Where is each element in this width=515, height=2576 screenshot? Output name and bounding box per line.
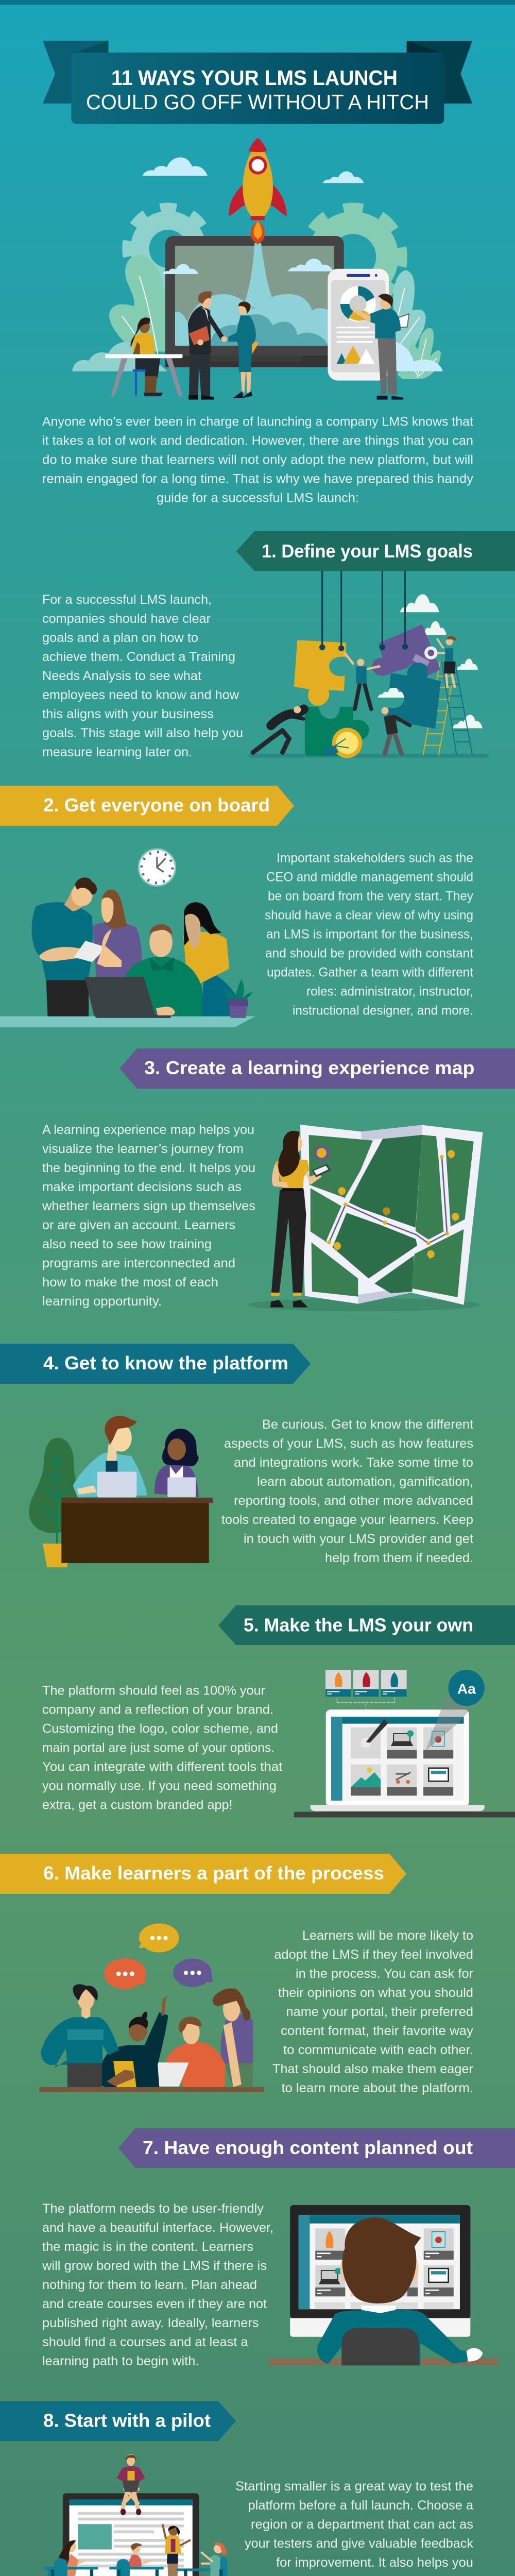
laptop [85,977,171,1018]
illustration: classroom with big screen [0,2454,227,2576]
text block 1: Needs Analysis to see what [42,669,201,683]
person: seated middle [109,2543,164,2576]
illustration: puzzle team [249,571,489,758]
shelf [294,1812,515,1817]
text block 5 [42,1684,283,1812]
text block 4: in touch with your LMS provider and get [244,1532,473,1546]
text block 3: visualize the learner’s journey from [42,1142,244,1156]
person: man pushing [253,706,304,752]
desk [61,1498,213,1563]
laptop [163,236,344,367]
person: woman on ladder [424,636,457,688]
text block 4: aspects of your LMS, such as how features [224,1436,473,1451]
text block 4: Be curious. Get to know the different [262,1417,473,1432]
text block 6 [272,1928,474,2095]
person: man in teal sweater [41,1984,119,2087]
puzzle: purple [372,624,440,676]
text block 6: name your portal, their preferred [286,2005,473,2019]
strings [322,571,405,648]
illustration: two people at desk with laptops [29,1416,213,1567]
icon: plant [29,1438,78,1567]
text block 5: main portal are just some of your options. [42,1740,274,1755]
person: man in green [125,924,202,1016]
icon: sky clouds [143,157,364,183]
text block 1: companies should have clear [42,612,211,626]
text block 4: tools created to engage your learners. Keep [221,1513,473,1527]
heading 7 [118,2128,515,2168]
text block 1: goals and a plan on how to [42,631,198,645]
text block 5: you normally use. If you need something [42,1778,277,1793]
exhaust plume [243,243,276,307]
map [300,1125,483,1305]
person: man in teal [32,877,107,1016]
icon: plants [109,255,441,379]
monitor [290,2205,470,2337]
text block 2: Important stakeholders such as the [277,851,473,866]
text block 7: The platform needs to be user-friendly [42,2201,264,2216]
section 8 [0,2401,473,2576]
text block 7: should find a courses and at least a [42,2335,248,2349]
person: woman in yellow [156,902,242,1016]
text block 2: roles: administrator, instructor, [306,984,473,998]
person: man [73,1416,147,1497]
text block 6: to communicate with each other. [283,2043,473,2057]
section 1 [42,531,515,759]
text block 3: learning opportunity. [42,1294,162,1309]
heading 8 [0,2401,236,2441]
text block 7: the magic is in the content. Learners [42,2240,253,2254]
text block 1: achieve them. Conduct a Training [42,650,235,664]
icon: typography badge [425,1670,485,1751]
icon: gears [127,207,403,307]
text block 3: also need to see how training [42,1237,212,1251]
screen [57,2493,226,2576]
hero illustration: rocket launching from laptop [72,138,443,400]
text block 8: for improvement. It also helps you [276,2555,473,2570]
title banner: COULD GO OFF WITHOUT A HITCH [86,90,429,114]
icon: light bulb [323,728,362,758]
intro paragraph: remain engaged for a long time. That is why we have prepared this handy [42,472,474,486]
section 4 [0,1344,473,1567]
table [0,1016,255,1027]
title banner [43,41,472,124]
heading 4 [0,1344,311,1384]
text block 6: Learners will be more likely to [302,1928,473,1943]
text block 1: For a successful LMS launch, [42,592,212,607]
text block 3: or are given an account. Learners [42,1218,235,1232]
text block 3: whether learners sign up themselves [42,1199,255,1213]
section 2 [0,786,473,1027]
text block 2: should have a clear view of why using [265,908,473,922]
text block 6: That should also make them eager [272,2062,473,2076]
text block 2: updates. Gather a team with different [267,965,473,980]
text block 3: programs are interconnected and [42,1256,235,1270]
text block 2: instructional designer, and more. [293,1004,473,1018]
desk [268,2359,499,2365]
text block 7 [42,2201,273,2368]
text block 8: region or a department that can act as [251,2517,473,2532]
text block 5: You can integrate with different tools that [42,1760,283,1774]
person: man in orange [150,2016,226,2087]
heading 3: 3. Create a learning experience map [144,1057,475,1078]
text block 4: learn about automation, gamification, [257,1475,473,1489]
person: seated left [44,2540,98,2576]
heading 2: 2. Get everyone on board [43,794,270,816]
text block 6: content format, their favorite way [281,2024,474,2038]
laptop [311,1709,485,1811]
heading 3 [119,1048,515,1089]
person: seated woman at desk [105,317,183,397]
illustration: learner at monitor [268,2205,499,2365]
person: woman's hand [97,929,122,967]
text block 7: nothing for them to learn. Plan ahead [42,2278,257,2292]
text block 2: and should be provided with constant [265,946,473,960]
text block 1: this aligns with your business [42,707,214,721]
illustration: customizable laptop [294,1670,515,1817]
icon: wall clock [139,849,176,886]
illustration: group discussion [40,1923,264,2092]
intro paragraph: it takes a lot of work and dedication. However, there are things that you can [42,434,473,448]
person: woman [154,1429,199,1497]
title banner: 11 WAYS YOUR LMS LAUNCH [111,66,398,90]
person: woman sitting on screen [116,2454,145,2515]
text block 2: an LMS is important for the business, [266,927,473,942]
speech bubbles [104,1923,213,1989]
heading 1 [236,531,515,571]
text block 8: your testers and give valuable feedback [245,2536,473,2551]
text block 7: and create courses even if they are not [42,2297,267,2311]
person: businessman shaking hands [188,292,227,400]
icon: ground clouds [72,342,443,371]
heading 1: 1. Define your LMS goals [262,540,473,562]
person: woman arm raised [98,1995,168,2087]
person: seated right [177,2543,227,2576]
text block 6: to learn more about the platform. [281,2081,473,2095]
text block 1: employees need to know and how [42,688,239,702]
text block 8: Starting smaller is a great way to test the [235,2479,473,2494]
text block 1: measure learning later on. [42,745,192,759]
person: man using phone [351,294,409,400]
illustration: team at laptop [0,849,255,1027]
text block 5: company and a reflection of your brand. [42,1702,273,1717]
puzzle: green [305,707,369,756]
heading 8: 8. Start with a pilot [43,2410,211,2431]
icon: rocket [229,138,287,245]
person: woman behind [93,890,142,988]
text block 4: and integrations work. Take some time to [234,1455,473,1470]
person: woman in purple dress [213,1988,253,2087]
section 6 [0,1854,474,2095]
heading 4: 4. Get to know the platform [43,1352,288,1374]
text block 6: their opinions on what you should [278,1986,473,2000]
person: man on puzzle [345,653,380,709]
intro paragraph: do to make sure that learners will not only adopt the new platform, but will [42,452,473,467]
person from behind [317,2217,483,2365]
text block 7: will grow bored with the LMS if there is [42,2259,267,2273]
intro paragraph [42,414,474,505]
text block 2: be on board from the very start. They [268,889,473,904]
text block 2 [265,851,473,1018]
intro paragraph: Anyone who’s ever been in charge of launching a company LMS knows that [42,414,473,429]
text block 4 [221,1417,473,1565]
text block 4: help from them if needed. [325,1551,473,1565]
text block 3: make important decisions such as [42,1180,242,1194]
puzzle: teal [387,663,441,729]
text block 5: The platform should feel as 100% your [42,1684,265,1698]
text block 4: reporting tools, and other more advanced [234,1494,473,1508]
illustration: woman reading map [248,1125,483,1311]
text block 3: how to make the most of each [42,1275,218,1290]
person: man lifting [381,707,410,753]
person: woman with phone [270,1131,331,1308]
text block 2: CEO and middle management should [266,870,473,884]
table [40,2087,264,2092]
text block 7: published right away. Ideally, learners [42,2316,259,2330]
heading 6: 6. Make learners a part of the process [43,1862,384,1884]
person: standing presenter [163,2524,191,2576]
intro paragraph: guide for a successful LMS launch: [157,490,359,505]
rows of chairs and legs [51,2569,226,2576]
clouds [377,594,483,728]
text block 1 [42,592,243,759]
text block 6: adopt the LMS if they feel involved [274,1947,473,1962]
text block 8 [235,2479,473,2576]
text block 3: the beginning to the end. It helps you [42,1161,255,1175]
text block 8: platform before a full launch. Choose a [248,2498,473,2513]
text block 6: in the process. You can ask for [296,1967,473,1981]
text block 5: Customizing the logo, color scheme, and [42,1722,278,1736]
text block 7: learning path to begin with. [42,2354,199,2368]
text block 7: and have a beautiful interface. However, [42,2221,273,2235]
brand thumbnails [325,1670,407,1730]
puzzle: yellow [294,640,346,706]
text block 1: goals. This stage will also help you [42,726,243,740]
ladders [423,662,472,755]
heading 2 [0,786,294,826]
heading 5: 5. Make the LMS your own [244,1615,473,1635]
text block 5: extra, get a custom branded app! [42,1798,233,1812]
icon: typography badge: Aa [457,1681,476,1697]
icon: potted plant [222,979,253,1018]
heading 7: 7. Have enough content planned out [143,2137,473,2158]
section 7 [42,2128,515,2368]
text block 3: A learning experience map helps you [42,1123,254,1137]
icon: phone with dashboard [328,269,389,381]
section 5 [42,1605,515,1817]
person: businesswoman [228,301,259,398]
heading 5 [218,1605,515,1645]
text block 3 [42,1123,255,1309]
heading 6 [0,1854,406,1894]
section 3 [42,1048,515,1311]
